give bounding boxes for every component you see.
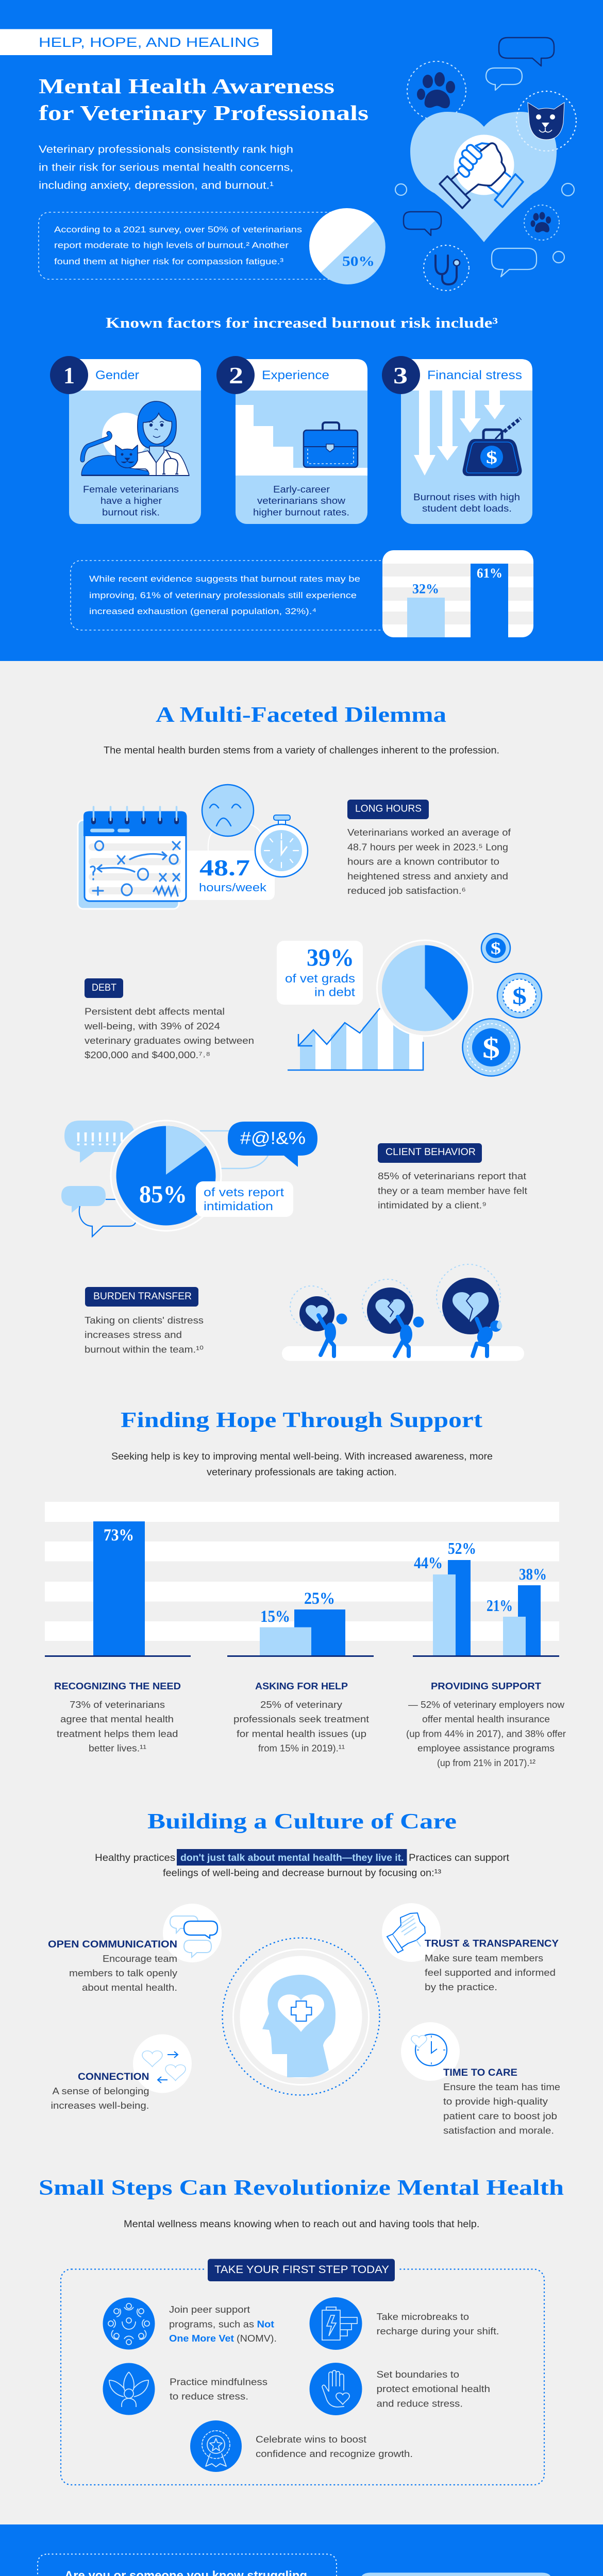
badge: debt — [85, 978, 123, 998]
badge: long hours — [347, 800, 429, 819]
text block: long hours: heightened stress and anxiety and — [347, 871, 508, 882]
panel: factor 3 financial stress: student debt loads. — [422, 503, 512, 514]
text block: providing support — [406, 1681, 566, 1768]
text block: burden transfer: Taking on clients' distress — [85, 1315, 204, 1326]
text block: burden transfer: increases stress and — [85, 1329, 182, 1340]
pie chart: 50%: 50% — [342, 253, 375, 269]
text block: providing support: PROVIDING SUPPORT — [431, 1681, 541, 1691]
callout: exhaustion evidence: While recent evidence suggests that burnout rates may be — [89, 574, 360, 584]
panel: main content background — [0, 661, 603, 2524]
pie chart: 50% — [309, 208, 386, 284]
text block: recognizing the need: 73% of veterinarians — [70, 1699, 165, 1710]
text block: time to care — [443, 2067, 560, 2136]
icon group: open communication — [163, 1904, 222, 1962]
intro text: in their risk for serious mental health concerns, — [39, 162, 293, 173]
title — [39, 74, 368, 125]
step text: celebrate wins — [256, 2434, 413, 2459]
step text: mindfulness: to reduce stress. — [170, 2391, 248, 2402]
number badge 3: 3 — [393, 362, 408, 388]
text block: time to care: to provide high-quality — [443, 2096, 548, 2107]
bars: 44% to 52% and 21% to 38%: 44% — [414, 1553, 443, 1572]
panel: factor 3 financial stress: Burnout rises with high — [413, 492, 520, 502]
number badge 1 — [50, 356, 88, 394]
text block: open communication: OPEN COMMUNICATION — [48, 1939, 177, 1950]
step text: mindfulness: Practice mindfulness — [170, 2376, 267, 2387]
step: microbreaks — [309, 2297, 499, 2350]
subheading: healthy practices — [95, 1849, 510, 1878]
icon: stopwatch — [255, 815, 308, 877]
panel: factor 2 experience: higher burnout rates. — [253, 507, 349, 517]
number badge 1: 1 — [63, 362, 75, 388]
illustration: long hours — [78, 785, 308, 909]
text block: debt: well-being, with 39% of 2024 — [84, 1021, 220, 1031]
step text: microbreaks: Take microbreaks to — [376, 2311, 469, 2322]
callout: exhaustion evidence: increased exhaustion (general population, 32%).⁴ — [89, 606, 316, 616]
text block: asking for help: ASKING FOR HELP — [255, 1681, 348, 1691]
card: 39% of vet grads in debt: in debt — [314, 985, 356, 998]
step text: peer support: Join peer support — [169, 2304, 250, 2315]
panel: factor 1 gender — [50, 356, 201, 524]
number badge 2: 2 — [229, 362, 243, 388]
step text: peer support — [169, 2304, 277, 2344]
text block: time to care: Ensure the team has time — [443, 2081, 560, 2092]
badge: take your first step today: TAKE YOUR FIRST STEP TODAY — [214, 2264, 389, 2276]
number badge 2 — [216, 356, 255, 394]
bar chart: 32% vs 61%: 61% — [477, 566, 502, 581]
icon: lower light speech bubble — [492, 248, 537, 277]
bars: 15% to 25%: 15% — [260, 1607, 290, 1626]
heading: known factors: Known factors for increased burnout risk include³ — [106, 315, 498, 331]
text block: open communication: about mental health. — [82, 1982, 177, 1993]
subheading: seeking help — [111, 1451, 493, 1478]
text block: debt — [84, 978, 254, 1060]
badge: take your first step today — [205, 2259, 397, 2281]
bar chart: 32% vs 61%: 32% — [412, 581, 439, 597]
step text: celebrate wins: confidence and recognize growth. — [256, 2448, 413, 2459]
badge: debt: DEBT — [92, 982, 116, 993]
text block: recognizing the need: better lives.¹¹ — [89, 1742, 146, 1754]
icon: connector arc — [208, 823, 263, 851]
text block: time to care: TIME TO CARE — [443, 2067, 517, 2078]
intro text — [39, 144, 293, 192]
callout: 2021 survey with 50% pie: report moderate to high levels of burnout.² Another — [54, 240, 289, 250]
text block: asking for help: professionals seek treatment — [233, 1714, 369, 1724]
text block: debt: Persistent debt affects mental — [85, 1006, 225, 1017]
badge: long hours: LONG HOURS — [355, 804, 422, 814]
step text: boundaries: and reduce stress. — [376, 2398, 463, 2409]
intro text: Veterinary professionals consistently rank high — [39, 144, 293, 156]
text block: long hours: hours are a known contributor to — [347, 856, 499, 867]
text block: client behavior: they or a team member have felt — [378, 1185, 527, 1196]
text block: client behavior — [378, 1143, 527, 1211]
icon: calendar — [83, 807, 187, 901]
card: of vets report intimidation: of vets report — [204, 1185, 284, 1199]
bars: 44% to 52% and 21% to 38%: 21% — [487, 1596, 513, 1615]
pie chart: 85% — [111, 1121, 221, 1231]
panel: factor 3 financial stress — [382, 356, 532, 524]
icon: small coin — [481, 934, 510, 962]
panel: factor 2 experience: veterinarians show — [257, 496, 346, 506]
icon group: connection — [133, 2034, 192, 2093]
callout: exhaustion evidence — [71, 561, 395, 630]
subheading: healthy practices: feelings of well-being and decrease burnout by focusing on:¹³ — [163, 1868, 441, 1878]
text block: trust and transparency: Make sure team members — [425, 1953, 543, 1963]
banner: help, hope, and healing — [0, 29, 272, 55]
figure 1 — [290, 1286, 347, 1356]
text block: debt: $200,000 and $400,000.⁷˒⁸ — [85, 1049, 210, 1060]
icon: small decorative circles — [395, 183, 574, 263]
title: for Veterinary Professionals — [39, 101, 368, 125]
intro text: including anxiety, depression, and burnout.¹ — [39, 180, 274, 192]
text block: recognizing the need: treatment helps them lead — [57, 1728, 178, 1739]
icon: sad face — [202, 785, 254, 836]
pie chart: 85%: 85% — [139, 1181, 187, 1208]
text block: client behavior: intimidated by a client.⁹ — [378, 1199, 487, 1211]
banner: help, hope, and healing: HELP, HOPE, AND HEALING — [39, 35, 260, 50]
text block: connection: increases well-being. — [51, 2100, 149, 2111]
text block: long hours: Veterinarians worked an average of — [347, 827, 511, 838]
panel: factor 1 gender: Female veterinarians — [83, 484, 179, 495]
panel: factor 1 gender: burnout risk. — [102, 507, 160, 517]
illustration: career stairs — [236, 405, 367, 476]
text block: open communication: members to talk openly — [69, 1968, 178, 1978]
text block: asking for help — [233, 1681, 369, 1754]
callout: suicide and crisis lifeline — [360, 2573, 552, 2576]
subheading: dilemma: The mental health burden stems from a variety of challenges inherent to the profession. — [104, 745, 499, 756]
icon: large coin: $ — [482, 1032, 500, 1064]
badge: client behavior: CLIENT BEHAVIOR — [386, 1147, 476, 1158]
illustration: people carrying growing broken hearts — [282, 1264, 524, 1361]
badge: client behavior — [378, 1143, 482, 1163]
panel: factor 1 gender: have a higher — [100, 496, 162, 506]
bars: 44% to 52% and 21% to 38%: 38% — [519, 1565, 547, 1583]
text block: trust and transparency: TRUST & TRANSPARENCY — [425, 1938, 559, 1950]
icon: exclamation bubble: !!!!!!! — [75, 1128, 125, 1149]
card: 39% of vet grads in debt — [277, 941, 363, 1005]
callout: are you struggling — [38, 2554, 337, 2576]
text block: recognizing the need — [54, 1681, 181, 1754]
bar chart: 32% vs 61% — [382, 550, 533, 637]
text block: connection: A sense of belonging — [53, 2086, 149, 2096]
text block: connection: CONNECTION — [78, 2072, 149, 2082]
subheading: mental wellness: Mental wellness means knowing when to reach out and having tools that help. — [124, 2219, 479, 2230]
text block: trust and transparency: by the practice. — [425, 1981, 497, 1992]
icon: paw in dashed circle — [407, 61, 466, 120]
card: 48.7 hours per week: hours/week — [199, 881, 267, 894]
text block: asking for help: from 15% in 2019).¹¹ — [258, 1742, 345, 1754]
icon group: trust and transparency — [382, 1903, 441, 1962]
callout: 2021 survey with 50% pie: found them at higher risk for compassion fatigue.³ — [54, 257, 283, 266]
bars: 44% to 52% and 21% to 38% — [414, 1539, 547, 1656]
panel: factor 3 financial stress: Financial stress — [427, 368, 522, 382]
text block: debt: veterinary graduates owing between — [85, 1035, 254, 1046]
icon: calendar backing — [78, 820, 179, 909]
step text: peer support: One More Vet — [169, 2333, 234, 2344]
bars: 44% to 52% and 21% to 38%: 52% — [448, 1539, 476, 1557]
icon: swearing bubble — [228, 1122, 317, 1167]
badge: burden transfer: BURDEN TRANSFER — [93, 1291, 192, 1302]
icon: swearing bubble: #@!&% — [240, 1128, 306, 1148]
icon: small coin: $ — [491, 939, 501, 957]
number badge 3 — [382, 356, 420, 394]
icon: medium coin: $ — [512, 983, 527, 1009]
badge: burden transfer — [85, 1287, 198, 1307]
subheading: healthy practices: Healthy practices — [95, 1853, 175, 1863]
step: mindfulness — [103, 2363, 267, 2415]
title: Mental Health Awareness — [39, 74, 334, 98]
bars: 73% — [93, 1521, 145, 1656]
step: celebrate wins — [190, 2420, 413, 2472]
text block: long hours — [347, 800, 511, 896]
panel: factor 2 experience: Experience — [262, 368, 329, 382]
callout: 2021 survey with 50% pie: According to a 2021 survey, over 50% of veterinarians — [54, 225, 302, 234]
step text: celebrate wins: Celebrate wins to boost — [256, 2434, 366, 2445]
text block: burden transfer: burnout within the team.¹⁰ — [85, 1344, 204, 1355]
icon: briefcase — [304, 422, 358, 467]
step text: mindfulness — [170, 2376, 267, 2402]
callout: 2021 survey with 50% pie — [39, 208, 386, 284]
icon: large heart — [410, 112, 557, 242]
panel: take your first step today — [61, 2259, 544, 2485]
chart: rising debt columns — [288, 1008, 423, 1070]
icon: stethoscope — [424, 245, 469, 291]
subheading: seeking help: Seeking help is key to improving mental well-being. With increased awareness, more — [111, 1451, 493, 1462]
figure 3 — [437, 1264, 502, 1356]
diagram: head with heart and cross — [223, 1938, 379, 2095]
icon: light speech bubble — [486, 68, 522, 90]
step text: boundaries: protect emotional health — [376, 2383, 490, 2394]
text block: providing support: (up from 44% in 2017), and 38% offer — [406, 1728, 566, 1739]
subheading: healthy practices: don't just talk about mental health—they live it. — [180, 1853, 404, 1863]
bars: 15% to 25%: 25% — [304, 1589, 335, 1608]
text block: long hours: 48.7 hours per week in 2023.⁵ Long — [347, 842, 508, 852]
icon group: time to care — [401, 2022, 460, 2081]
illustration: client intimidation pie and bubbles — [61, 1121, 317, 1236]
bars: 73%: 73% — [104, 1526, 134, 1545]
text block: providing support: offer mental health insurance — [422, 1714, 550, 1724]
panel: factor 1 gender: Gender — [95, 368, 139, 382]
text block: time to care: satisfaction and morale. — [443, 2125, 554, 2136]
card: of vets report intimidation — [196, 1181, 293, 1217]
icon: cat in dashed circle — [516, 91, 576, 151]
step text: peer support: programs, such as — [169, 2318, 254, 2330]
callout: exhaustion evidence: improving, 61% of veterinary professionals still experience — [89, 590, 357, 600]
icon: top dark speech bubble — [499, 38, 554, 66]
text block: client behavior: 85% of veterinarians report that — [378, 1171, 526, 1181]
panel: crisis lifeline background — [0, 2524, 603, 2576]
text block: recognizing the need: RECOGNIZING THE NEED — [54, 1681, 181, 1691]
illustration: heart, handshake and pets — [395, 38, 576, 291]
icon: small paw — [524, 205, 559, 240]
step text: boundaries — [376, 2369, 490, 2409]
text block: asking for help: 25% of veterinary — [260, 1699, 343, 1710]
text block: asking for help: for mental health issues (up — [237, 1728, 366, 1739]
illustration: debt chart, pie and coins — [277, 934, 542, 1076]
figure 2 — [362, 1279, 424, 1356]
text block: trust and transparency — [425, 1938, 559, 1992]
text block: open communication — [48, 1939, 178, 1993]
icon: handshake — [440, 135, 523, 208]
ground — [282, 1346, 524, 1361]
icon: debt weight with chain — [463, 418, 522, 476]
pie chart: 39% — [377, 940, 473, 1036]
step text: peer support: (NOMV). — [237, 2333, 277, 2344]
icon: medium coin — [497, 974, 542, 1018]
card: 48.7 hours per week — [180, 851, 275, 900]
text block: time to care: patient care to boost job — [443, 2110, 557, 2122]
heading: finding hope: Finding Hope Through Support — [121, 1409, 482, 1432]
text block: burden transfer — [85, 1287, 204, 1355]
arrows: falling debt — [414, 391, 505, 476]
text block: providing support: (up from 21% in 2017).¹² — [437, 1757, 535, 1768]
card: 39% of vet grads in debt: 39% — [307, 944, 354, 972]
illustration: female vet with cat — [81, 401, 189, 476]
panel: factor 2 experience — [216, 356, 367, 524]
icon: debt weight with chain: $ — [486, 448, 497, 467]
heading: small steps: Small Steps Can Revolutionize Mental Health — [39, 2176, 564, 2200]
icon: large coin — [463, 1019, 520, 1076]
card: of vets report intimidation: intimidation — [204, 1199, 273, 1213]
card: 39% of vet grads in debt: of vet grads — [285, 972, 355, 985]
icon: small light bubble — [61, 1186, 106, 1213]
text block: recognizing the need: agree that mental health — [60, 1714, 174, 1724]
panel: hero and burnout factors background — [0, 0, 603, 661]
text block: open communication: Encourage team — [103, 1953, 177, 1964]
step text: peer support: Not — [257, 2318, 274, 2330]
icon: lower dark speech bubble — [404, 212, 441, 235]
bars: 15% to 25% — [260, 1589, 345, 1656]
card: 48.7 hours per week: 48.7 — [199, 855, 250, 880]
subheading: seeking help: veterinary professionals are taking action. — [207, 1467, 397, 1478]
step: boundaries — [309, 2363, 490, 2415]
heading: building a culture of care: Building a Culture of Care — [147, 1810, 457, 1834]
text block: providing support: employee assistance programs — [417, 1742, 555, 1754]
text block: trust and transparency: feel supported and informed — [425, 1967, 556, 1978]
step: peer support — [103, 2298, 277, 2349]
connector lines — [200, 1131, 268, 1168]
icon: outline bubble — [79, 1199, 136, 1236]
text block: long hours: reduced job satisfaction.⁶ — [347, 885, 466, 896]
step text: boundaries: Set boundaries to — [376, 2369, 459, 2380]
step text: microbreaks: recharge during your shift. — [376, 2326, 499, 2336]
icon: exclamation bubble — [64, 1121, 135, 1163]
heading: a multi-faceted dilemma: A Multi-Faceted Dilemma — [156, 703, 446, 727]
subheading: healthy practices: Practices can support — [409, 1853, 510, 1863]
text block: connection — [51, 2072, 149, 2111]
text block: providing support: — 52% of veterinary employers now — [408, 1699, 565, 1710]
panel: factor 2 experience: Early-career — [273, 484, 330, 495]
step text: microbreaks — [376, 2311, 499, 2336]
bar chart: seeking support — [45, 1502, 559, 1656]
